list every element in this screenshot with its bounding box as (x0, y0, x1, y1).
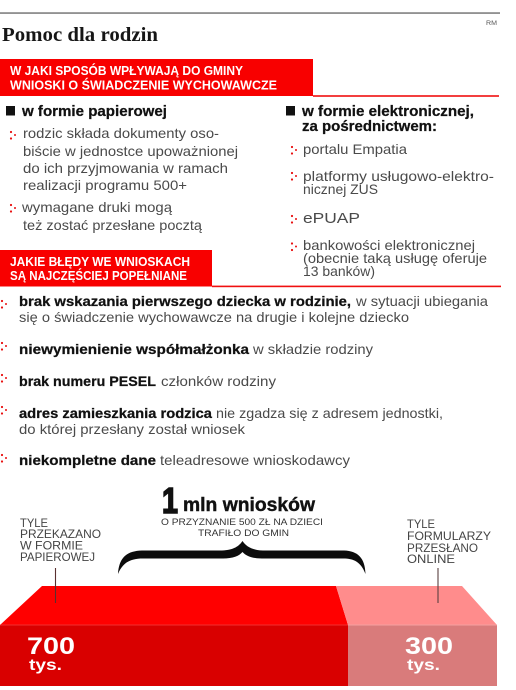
leader line: online (437, 568, 439, 603)
icon: square bullet (286, 106, 295, 116)
section header: how applications arrive: WNIOSKI O ŚWIADCZENIE WYCHOWAWCZE (10, 78, 277, 92)
error: spouse: niewymienienie współmałżonka (19, 341, 249, 357)
heading: electronic form: za pośrednictwem: (302, 119, 437, 135)
icon: square bullet (6, 106, 15, 116)
error: first child: się o świadczenie wychowawcze na drugie i kolejne dziecko (19, 309, 409, 325)
list item: send by post (10, 199, 202, 233)
section header: how applications arrive: W JAKI SPOSÓB WPŁYWAJĄ DO GMINY (10, 63, 244, 78)
error: spouse: w składzie rodziny (252, 341, 373, 357)
error: incomplete data (1, 452, 350, 468)
label: online: ONLINE (407, 552, 455, 566)
list item: online banking: bankowości elektronicznej (303, 237, 475, 253)
list item: submit in person: do ich przyjmowania w ramach (23, 160, 228, 176)
error: address: adres zamieszkania rodzica (19, 405, 212, 421)
value: 300 thousand: tys. (407, 657, 440, 674)
leader line: paper (54, 568, 56, 603)
label: paper: TYLE (20, 516, 48, 530)
column: paper form (6, 104, 238, 233)
3D bar: online share (336, 586, 497, 686)
list item: online banking: 13 banków) (303, 263, 375, 279)
error: address: do której przesłany został wniosek (19, 421, 246, 437)
headline figure: mln wniosków (183, 495, 315, 516)
error: PESEL: brak numeru PESEL (19, 373, 156, 389)
list item: send by post: wymagane druki mogą (21, 199, 172, 215)
label: online (407, 517, 491, 566)
error: spouse (1, 341, 373, 357)
section header: common errors: SĄ NAJCZĘŚCIEJ POPEŁNIANE (10, 268, 187, 283)
list item: online banking: (obecnie taką usługę oferuje (303, 250, 487, 266)
list item: submit in person (10, 125, 238, 193)
heading: electronic form (301, 104, 474, 135)
label: paper: PRZEKAZANO (20, 527, 101, 541)
value: 700 thousand: tys. (29, 657, 62, 674)
value: 700 thousand (27, 633, 75, 674)
column: electronic form (286, 104, 494, 279)
error: incomplete data: teleadresowe wnioskodawcy (160, 452, 350, 468)
error: PESEL: członków rodziny (161, 373, 276, 389)
error: PESEL (1, 373, 276, 389)
error: first child: w sytuacji ubiegania (355, 293, 488, 309)
curly brace (118, 541, 366, 574)
headline caption: O PRZYZNANIE 500 ZŁ NA DZIECI (161, 517, 323, 528)
label: paper (20, 516, 101, 564)
author credit: RM (486, 21, 497, 27)
label: paper: PAPIEROWEJ (20, 550, 95, 564)
list item: submit in person: rodzic składa dokumenty oso- (23, 125, 219, 141)
headline figure: 1 (162, 480, 178, 521)
error: incomplete data: niekompletne dane (19, 452, 156, 468)
panel: one million applications chart (0, 480, 497, 686)
panel: common errors (0, 250, 501, 468)
headline figure (162, 480, 315, 521)
title: Pomoc dla rodzin (2, 24, 158, 46)
3D bar: paper share (0, 586, 348, 686)
section header: common errors (0, 250, 501, 287)
error: address (1, 405, 443, 437)
section header: how applications arrive (0, 59, 499, 97)
list item: ZUS (291, 168, 494, 197)
label: paper: W FORMIE (20, 538, 83, 552)
label: online: FORMULARZY (407, 529, 491, 543)
list item: ePUAP: ePUAP (303, 210, 360, 227)
heading: electronic form: w formie elektronicznej, (301, 104, 474, 120)
error: first child: brak wskazania pierwszego dziecka w rodzinie, (19, 293, 351, 309)
label: online: TYLE (407, 517, 435, 531)
list item: ZUS: nicznej ZUS (303, 181, 378, 197)
headline caption (161, 517, 323, 539)
value: 300 thousand: 300 (405, 633, 453, 660)
list item: online banking (291, 237, 487, 279)
label: online: PRZESŁANO (407, 541, 478, 555)
value: 700 thousand: 700 (27, 633, 75, 660)
value: 300 thousand (405, 633, 453, 674)
list item: send by post: też zostać przesłane pocztą (23, 217, 202, 233)
panel: how applications arrive (0, 59, 499, 279)
section header: common errors: JAKIE BŁĘDY WE WNIOSKACH (10, 255, 190, 269)
headline caption: TRAFIŁO DO GMIN (198, 528, 289, 539)
error: address: nie zgadza się z adresem jednostki, (216, 405, 443, 421)
list item: Empatia: portalu Empatia (303, 141, 407, 157)
list item: submit in person: biście w jednostce upoważnionej (23, 143, 238, 159)
heading: paper form: w formie papierowej (21, 104, 167, 120)
list item: ZUS: platformy usługowo-elektro- (303, 168, 494, 184)
list item: submit in person: realizacji programu 500+ (23, 177, 187, 193)
error: first child (1, 293, 488, 325)
